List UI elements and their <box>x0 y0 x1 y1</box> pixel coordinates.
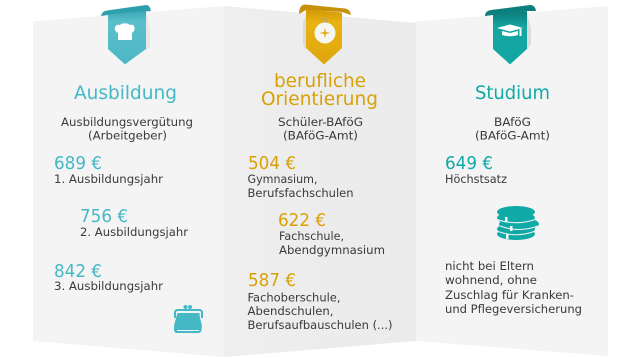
ribbon: Ausbildung with chef hat icon <box>101 5 151 64</box>
text: Schüler-BAföG (BAföG-Amt): (BAföG-Amt) <box>283 128 358 142</box>
amount: 587 €: Berufsaufbauschulen (...) <box>248 318 392 332</box>
amount: 622 €: 622 € <box>278 211 326 231</box>
amount: 842 € <box>54 262 163 293</box>
heading: berufliche Orientierung: berufliche <box>274 70 366 92</box>
amount: 587 € <box>248 271 392 332</box>
amount: 842 €: 3. Ausbildungsjahr <box>54 279 163 293</box>
amount: 587 €: 587 € <box>248 271 296 291</box>
text: BAföG (BAföG-Amt) <box>475 115 550 142</box>
heading: berufliche Orientierung <box>261 70 378 110</box>
amount: 587 €: Fachoberschule, <box>248 290 340 304</box>
text: nicht bei Eltern wohnend: und Pflegeversicherung <box>445 302 582 316</box>
icon: chef hat <box>115 23 135 40</box>
amount: 649 € <box>445 154 507 186</box>
heading: Ausbildung: Ausbildung <box>74 82 177 104</box>
icon: purse <box>174 305 202 333</box>
panel: Studium <box>416 5 608 356</box>
amount: 689 €: 689 € <box>54 154 102 174</box>
amount: 622 €: Fachschule, <box>279 229 344 243</box>
amount: 504 €: Berufsfachschulen <box>248 186 354 200</box>
icon: compass <box>314 18 336 44</box>
amount: 842 €: 842 € <box>54 262 102 282</box>
amount: 504 €: Gymnasium, <box>248 172 318 186</box>
amount: 504 € <box>248 154 354 200</box>
text: nicht bei Eltern wohnend <box>445 259 582 316</box>
amount: 622 € <box>278 211 385 257</box>
amount: 756 €: 2. Ausbildungsjahr <box>80 225 188 239</box>
amount: 689 €: 1. Ausbildungsjahr <box>54 172 163 186</box>
text: nicht bei Eltern wohnend: Zuschlag für Kranken- <box>445 288 574 302</box>
text: BAföG (BAföG-Amt): BAföG <box>494 115 531 129</box>
amount: 504 €: 504 € <box>248 154 296 174</box>
amount: 622 €: Abendgymnasium <box>279 243 385 257</box>
text: Schüler-BAföG (BAföG-Amt) <box>278 115 363 142</box>
heading: Studium: Studium <box>475 82 550 104</box>
amount: 689 € <box>54 154 163 186</box>
amount: 649 €: 649 € <box>445 154 493 174</box>
text: Ausbildungsvergütung (Arbeitgeber) <box>61 115 193 142</box>
text: Schüler-BAföG (BAföG-Amt): Schüler-BAföG <box>278 115 363 129</box>
amount: 756 € <box>80 207 188 239</box>
amount: 756 €: 756 € <box>80 207 128 227</box>
text: nicht bei Eltern wohnend: wohnend, ohne <box>445 273 537 287</box>
text: Ausbildungsvergütung (Arbeitgeber): (Arbeitgeber) <box>88 128 167 142</box>
icon: coin stack <box>497 206 539 240</box>
ribbon: Studium with graduation cap icon <box>485 5 536 64</box>
panel: berufliche Orientierung <box>224 4 416 357</box>
heading: berufliche Orientierung: Orientierung <box>261 88 378 110</box>
amount: 649 €: Höchstsatz <box>445 172 507 186</box>
ribbon: berufliche Orientierung with compass icon <box>299 4 351 64</box>
text: BAföG (BAföG-Amt): (BAföG-Amt) <box>475 128 550 142</box>
amount: 587 €: Abendschulen, <box>248 304 334 318</box>
text: nicht bei Eltern wohnend: nicht bei Eltern <box>445 259 534 273</box>
panel: Ausbildung <box>33 5 224 357</box>
icon: graduation cap <box>497 24 523 36</box>
text: Ausbildungsvergütung (Arbeitgeber): Ausbildungsvergütung <box>61 115 193 129</box>
